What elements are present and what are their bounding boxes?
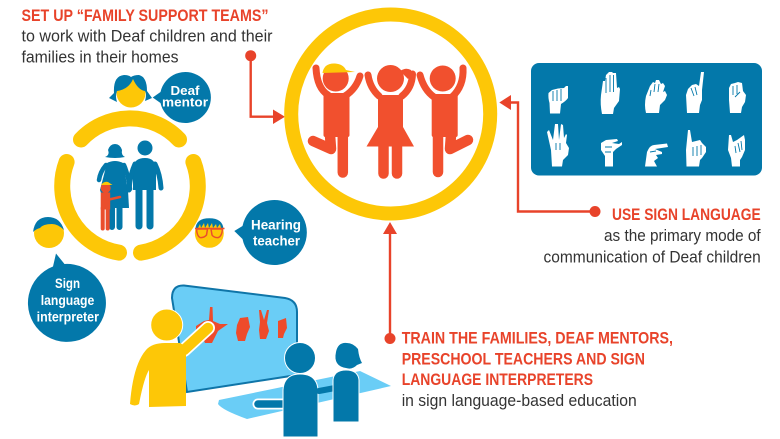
child with ponytail [366, 65, 414, 174]
callout: deaf mentor [153, 72, 211, 123]
illustration: classroom [130, 285, 391, 437]
icon: hand signs [547, 72, 746, 166]
text: family support teams [22, 6, 273, 66]
icon: family [99, 140, 161, 228]
text: train the families: PRESCHOOL TEACHERS AND SIGN [402, 349, 645, 368]
arrow: family support teams to children [245, 50, 285, 124]
text: train the families: in sign language-based education [402, 391, 637, 410]
text: train the families [402, 328, 673, 410]
desk [218, 371, 391, 419]
callout: sign language interpreter: Sign [55, 276, 80, 291]
callout: deaf mentor: Deaf [170, 84, 200, 98]
text: family support teams: SET UP “FAMILY SUPPORT TEAMS” [22, 6, 268, 25]
family support team ring [62, 118, 198, 253]
text: family support teams: to work with Deaf children and their [22, 27, 273, 46]
large yellow ring with children [291, 14, 490, 214]
text: use sign language: communication of Deaf children [544, 248, 761, 266]
icon: sign language interpreter [33, 217, 64, 248]
woman [99, 144, 130, 227]
text: train the families: LANGUAGE INTERPRETERS [402, 370, 593, 389]
callout: sign language interpreter: interpreter [37, 310, 100, 325]
student front [258, 342, 318, 437]
signs on board [196, 307, 287, 343]
teacher [130, 309, 208, 407]
whiteboard [172, 285, 297, 392]
callout: sign language interpreter [28, 254, 106, 342]
hand details [553, 75, 742, 156]
callout: hearing teacher [234, 200, 307, 265]
callout: hearing teacher: Hearing [251, 217, 301, 232]
callout: deaf mentor: mentor [162, 96, 208, 110]
child [101, 182, 120, 228]
student back [319, 343, 362, 422]
icon: deaf mentor [109, 75, 152, 108]
text: family support teams: families in their homes [22, 47, 178, 66]
arrow: training to children [383, 222, 397, 344]
child with cap [313, 63, 360, 172]
text: train the families: TRAIN THE FAMILIES, DEAF MENTORS, [402, 328, 673, 347]
man [129, 140, 161, 226]
arrow: sign language to children [499, 95, 600, 217]
icon: hearing teacher [195, 218, 224, 248]
callout: sign language interpreter: language [41, 293, 95, 308]
text: use sign language: as the primary mode of [604, 226, 761, 245]
panel: sign language hands [531, 63, 762, 176]
text: use sign language [544, 205, 761, 266]
child jumping [420, 66, 468, 172]
callout: hearing teacher: teacher [253, 234, 301, 249]
